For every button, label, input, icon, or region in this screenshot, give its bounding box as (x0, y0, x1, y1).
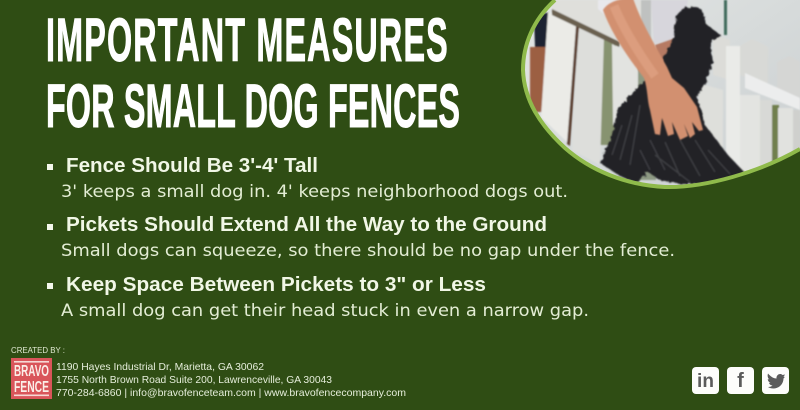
logo: Bravo Fence (11, 358, 52, 399)
icon: LinkedIn: in (697, 371, 714, 392)
measure 2: pickets to ground: Pickets Should Extend All the Way to the Ground (66, 213, 547, 236)
title: FOR SMALL DOG FENCES (46, 73, 460, 141)
photo border ring (523, 0, 800, 187)
photo: dog at white picket fence (520, 0, 800, 190)
logo: Bravo Fence: BRAVO (14, 363, 49, 380)
icon: Twitter (762, 367, 789, 394)
icon: Facebook: f (737, 370, 744, 392)
created by label: CREATED BY : (11, 345, 65, 355)
arm and hand (603, 0, 703, 140)
logo: Bravo Fence: FENCE (14, 379, 49, 396)
icon: Facebook (727, 367, 754, 394)
measure 3: picket spacing: Keep Space Between Pickets to 3" or Less (66, 273, 486, 296)
measure 2: pickets to ground: Small dogs can squeeze, so there should be no gap under the fence. (61, 241, 675, 260)
icon: LinkedIn (692, 367, 719, 394)
contact details: 1190 Hayes Industrial Dr, Marietta, GA 30062 (56, 361, 264, 373)
measure 2: pickets to ground (47, 213, 675, 260)
measure 1: fence height: Fence Should Be 3'-4' Tall (66, 154, 318, 177)
contact details: 770-284-6860 | info@bravofenceteam.com | www.bravofencecompany.com (56, 387, 406, 399)
dog (600, 7, 748, 184)
measure 3: picket spacing: A small dog can get their head stuck in even a narrow gap. (61, 301, 589, 320)
measure 1: fence height: 3' keeps a small dog in. 4' keeps neighborhood dogs out. (61, 182, 568, 201)
title (46, 7, 460, 141)
contact details: 1755 North Brown Road Suite 200, Lawrenceville, GA 30043 (56, 374, 332, 386)
contact details (56, 361, 406, 399)
measure 1: fence height (47, 154, 568, 201)
title: IMPORTANT MEASURES (46, 7, 448, 75)
measure 3: picket spacing (47, 273, 589, 320)
